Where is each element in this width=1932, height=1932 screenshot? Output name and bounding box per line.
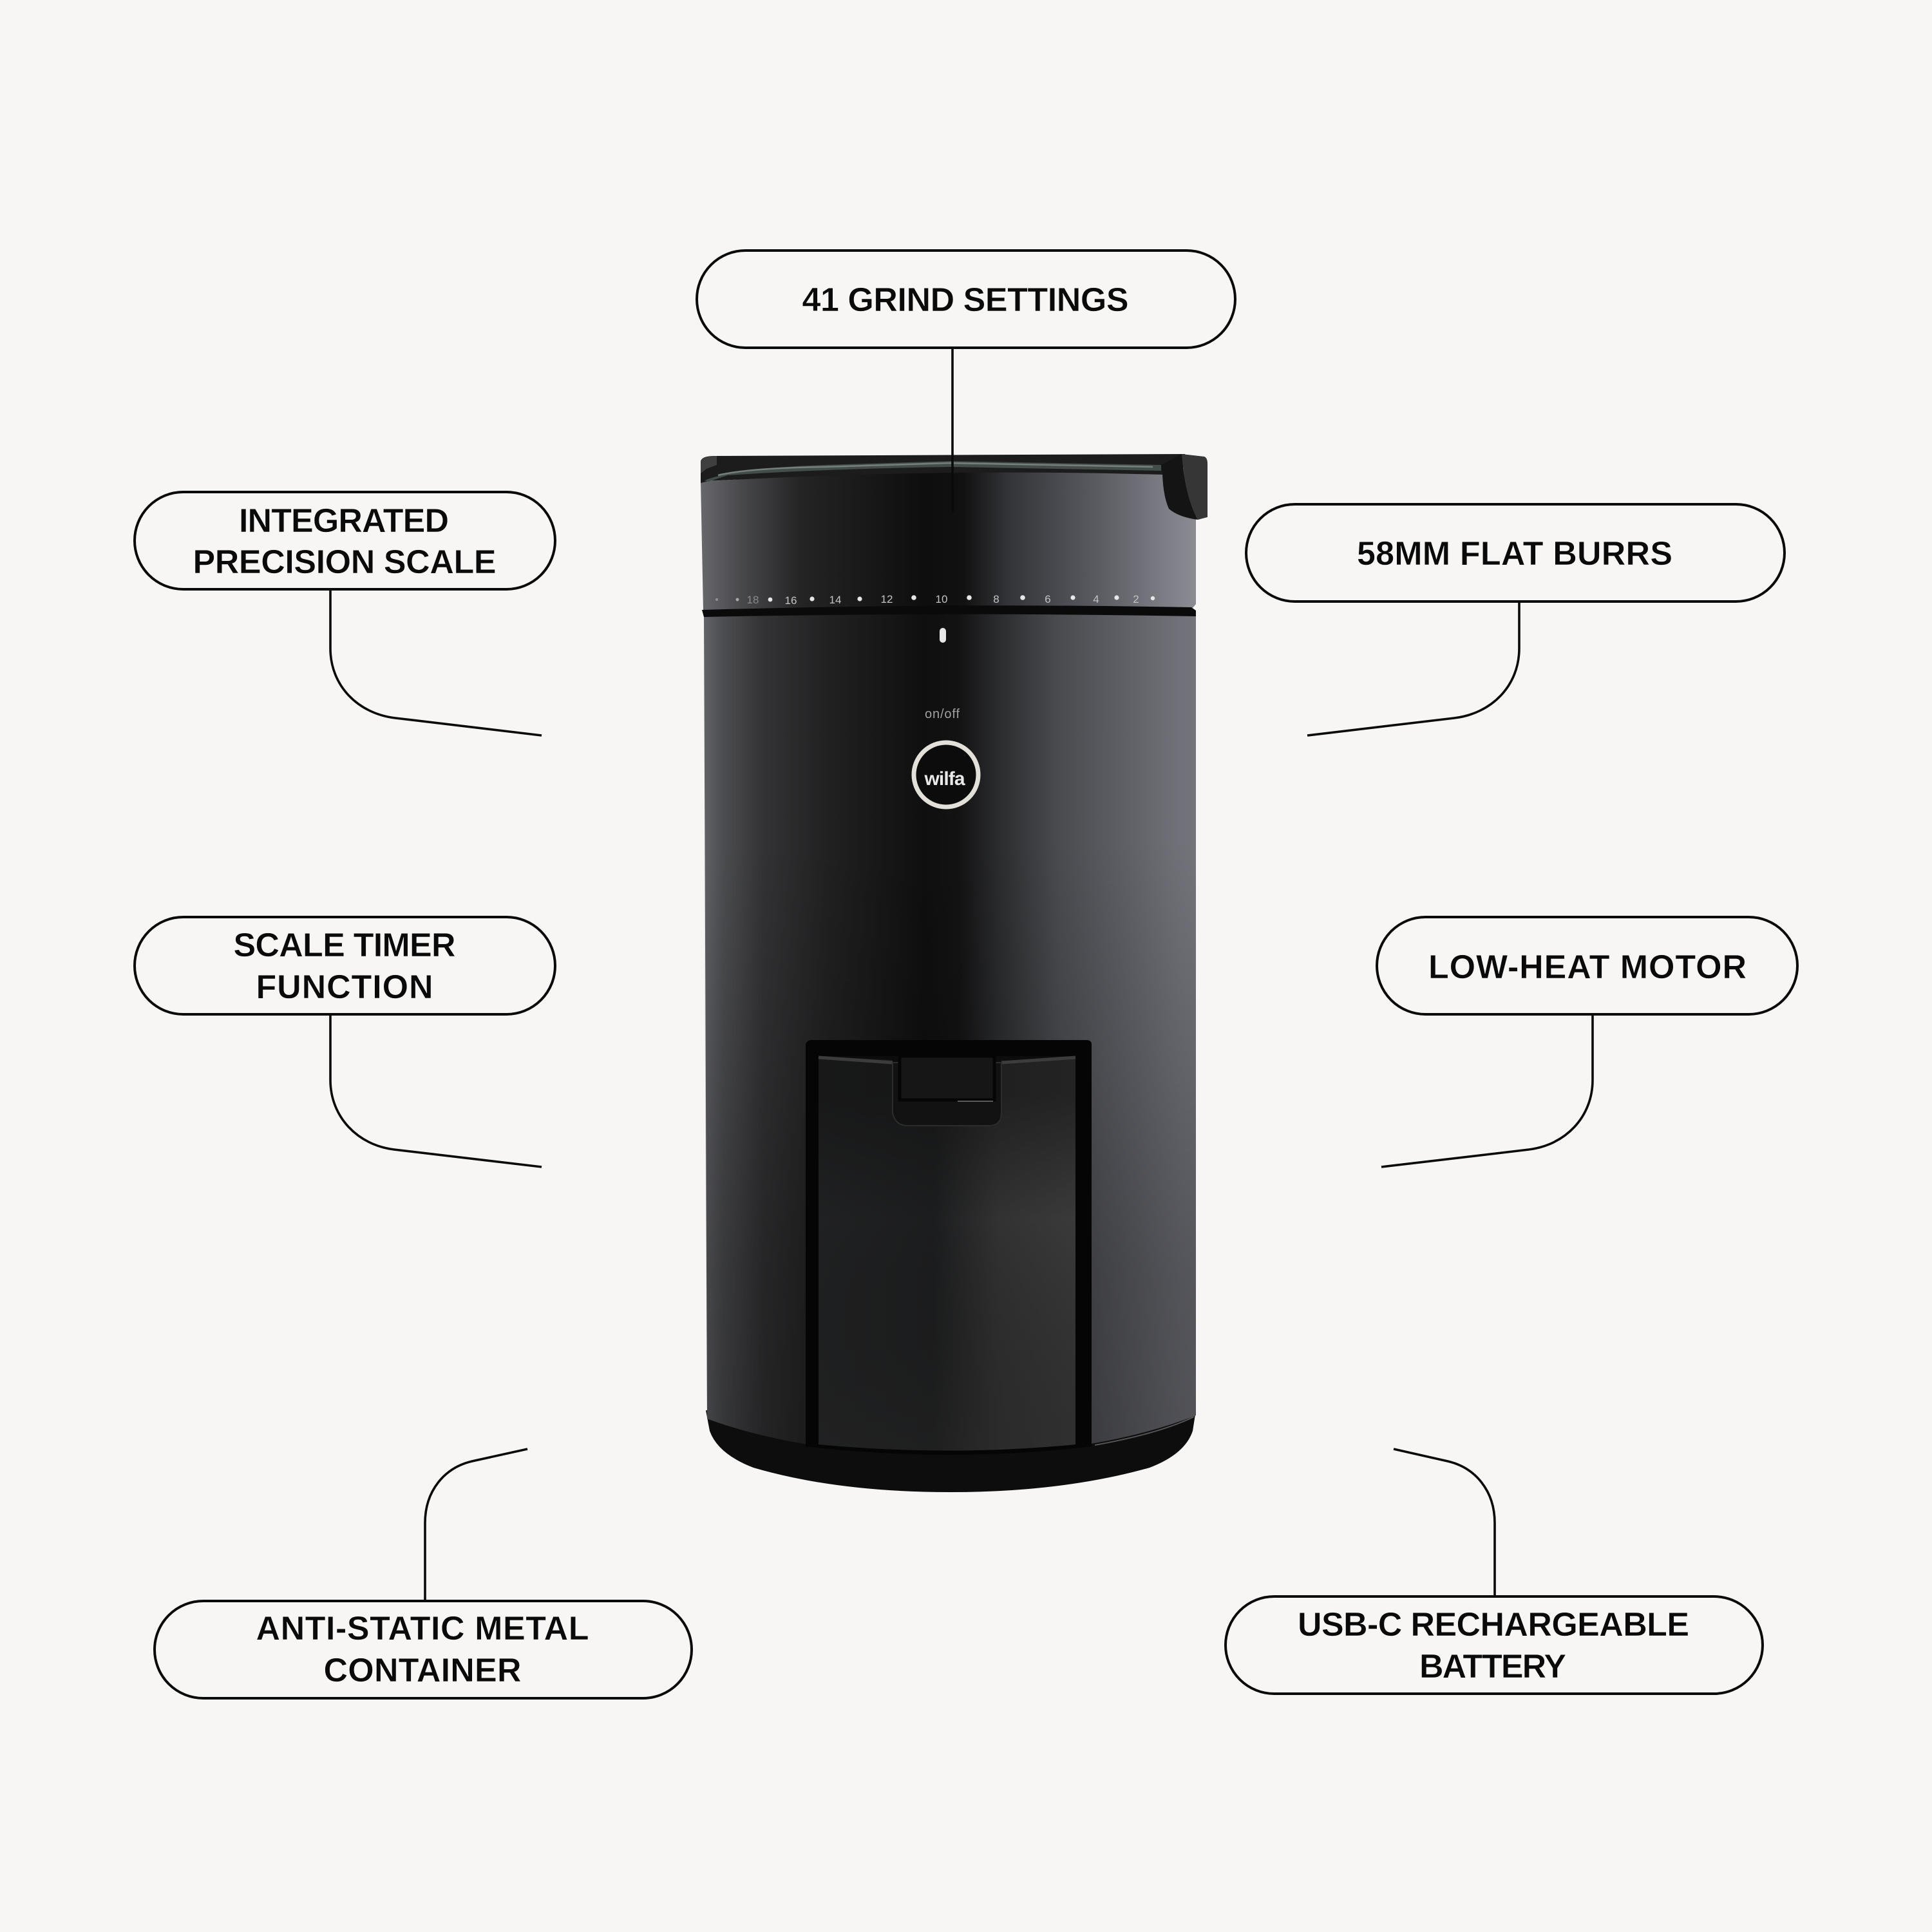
- dial numbers: 4: [1093, 593, 1099, 605]
- callout: usb-c rechargeable battery: BATTERY: [1419, 1648, 1566, 1685]
- on/off label: on/off: [925, 707, 960, 721]
- leader line: battery: [1394, 1449, 1495, 1596]
- callout: usb-c rechargeable battery: [1226, 1449, 1763, 1694]
- dial numbers: 8: [993, 593, 999, 605]
- dial numbers: 2: [1133, 593, 1139, 605]
- leader line: top: [951, 348, 954, 512]
- product: coffee grinder: [701, 454, 1208, 1492]
- container door recess: [806, 1040, 1092, 1455]
- callout: low-heat motor: LOW-HEAT MOTOR: [1428, 949, 1747, 986]
- hopper lid: [701, 454, 1185, 483]
- container handle notch: [893, 1056, 1001, 1126]
- callout: 41 grind settings: [697, 251, 1235, 512]
- callout: low-heat motor: [1377, 917, 1797, 1167]
- dial numbers: 6: [1045, 593, 1051, 605]
- dial numbers: 16: [785, 594, 797, 607]
- callout: integrated precision scale: PRECISION SCALE: [193, 544, 496, 581]
- dark gap under collar: [702, 605, 1196, 617]
- dial numbers: 10: [936, 593, 947, 605]
- grinder collar with dial: [701, 471, 1196, 611]
- callout: anti-static metal container: ANTI-STATIC METAL: [256, 1610, 589, 1647]
- dial dots: [715, 595, 1155, 601]
- callout: 58mm flat burrs: 58MM FLAT BURRS: [1357, 535, 1672, 573]
- callout: usb-c rechargeable battery: USB-C RECHARGEABLE: [1298, 1606, 1689, 1643]
- power button: [914, 743, 978, 807]
- callout: 41 grind settings: 41 GRIND SETTINGS: [802, 281, 1128, 319]
- position indicator: [940, 628, 946, 643]
- callout: scale timer function: SCALE TIMER: [233, 927, 456, 964]
- callout: scale timer function: FUNCTION: [256, 969, 433, 1006]
- leader line: integrated scale: [330, 590, 542, 735]
- callout: 58mm flat burrs: [1246, 504, 1785, 735]
- dial numbers: 18: [747, 594, 759, 606]
- dial numbers: 14: [829, 594, 841, 606]
- grinder body: [704, 613, 1196, 1455]
- power button: wilfa: [923, 768, 965, 790]
- callout: integrated precision scale: INTEGRATED: [239, 502, 449, 540]
- lid handle: [1161, 454, 1208, 520]
- leader line: motor: [1381, 1015, 1593, 1167]
- leader line: burrs: [1307, 602, 1519, 735]
- dial numbers: [747, 593, 1139, 607]
- container door panel: [819, 1056, 1075, 1450]
- callout: anti-static metal container: CONTAINER: [323, 1652, 522, 1689]
- callout: anti-static metal container: [155, 1449, 692, 1698]
- grinder base: [706, 1410, 1196, 1492]
- callout: integrated precision scale: [135, 492, 555, 735]
- leader line: container: [425, 1449, 527, 1600]
- leader line: timer: [330, 1015, 542, 1167]
- dial numbers: 12: [881, 593, 893, 605]
- callout: scale timer function: [135, 917, 555, 1167]
